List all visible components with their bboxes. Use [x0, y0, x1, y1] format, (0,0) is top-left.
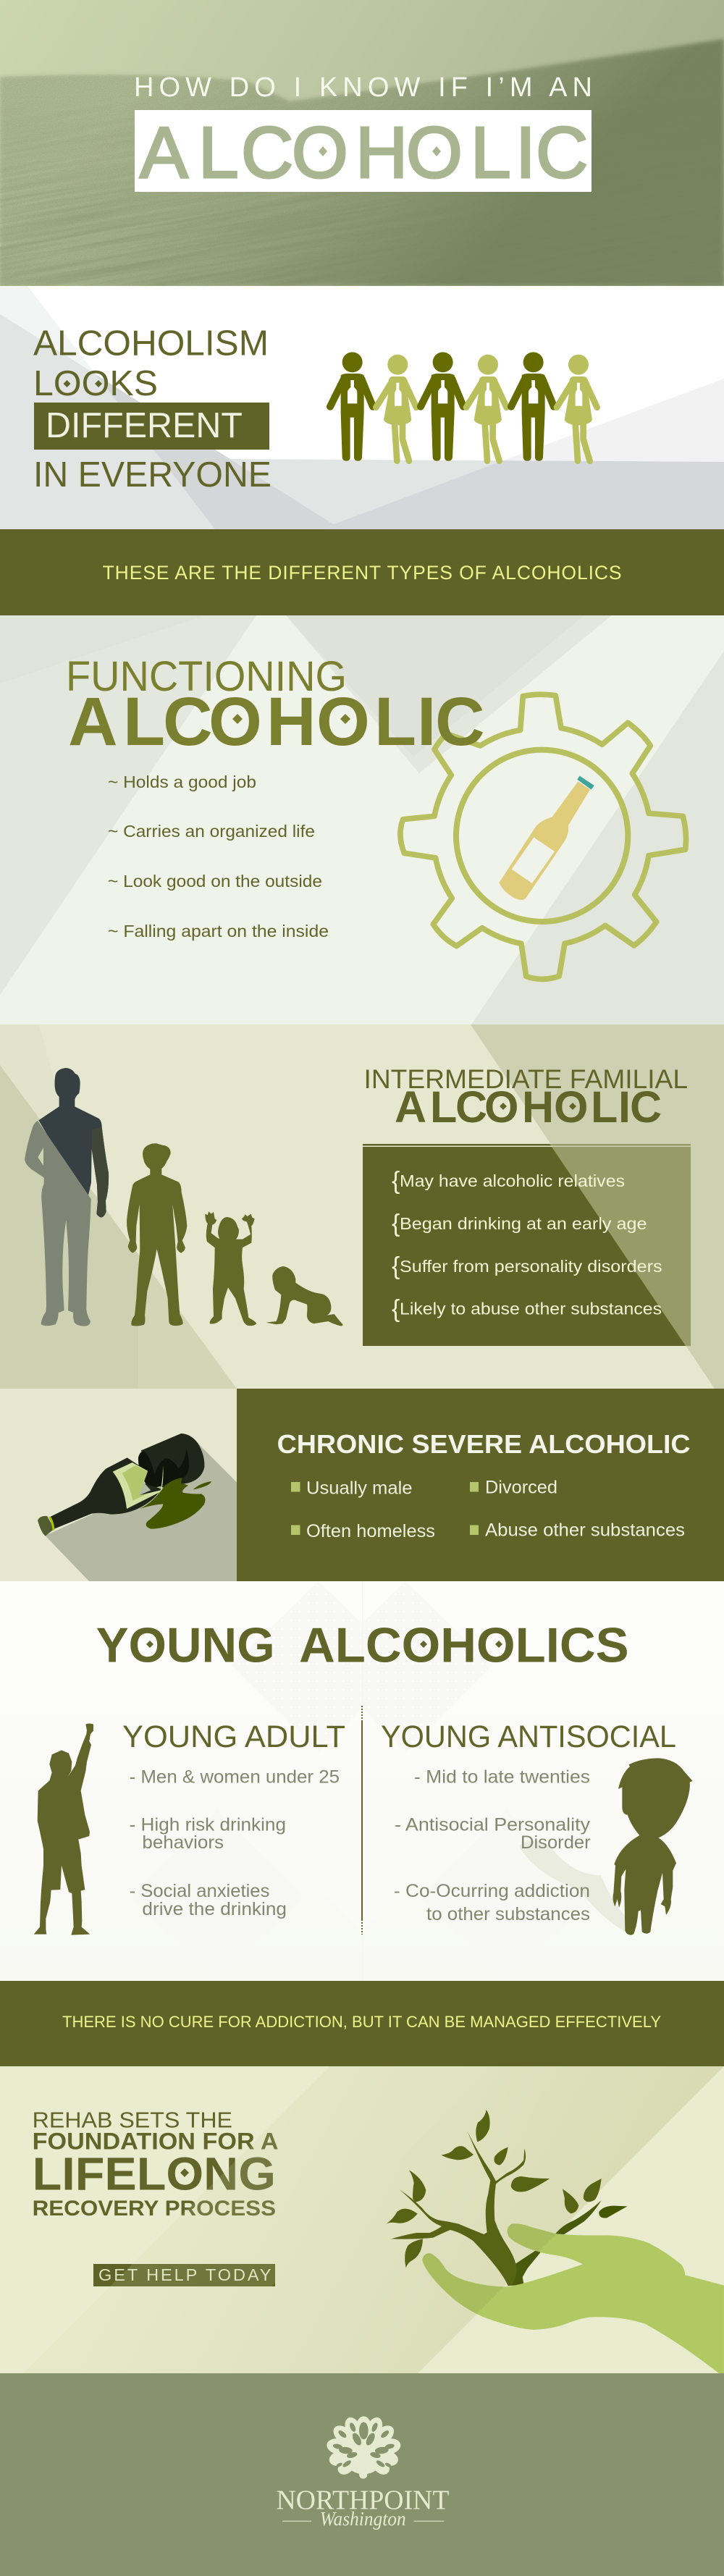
list: functioning traits: ~ Falling apart on the inside — [108, 922, 329, 940]
geometric background — [0, 615, 724, 1024]
box: intermediate traits: { — [392, 1210, 400, 1237]
box: intermediate traits: { — [392, 1295, 400, 1323]
silhouette: crawling baby — [266, 1266, 343, 1326]
heading: alcoholism looks different in everyone — [33, 324, 272, 494]
list: chronic traits: Usually male — [306, 1478, 413, 1499]
slanted background — [0, 2066, 724, 2373]
heading: rehab sets the foundation — [33, 2108, 279, 2221]
box: intermediate traits: { — [392, 1253, 400, 1280]
column: young antisocial: - Antisocial Personality — [395, 1815, 591, 1835]
silhouette: child — [127, 1143, 187, 1326]
column: young antisocial: - Co-Ocurring addiction — [394, 1881, 590, 1901]
heading: intermediate familial alcoholic: ALCOHOLIC — [395, 1082, 662, 1132]
box: intermediate traits — [363, 1144, 691, 1346]
icon: gear with bottle — [400, 694, 686, 979]
illustration: family silhouettes — [25, 1068, 343, 1326]
heading: alcoholism looks different in everyone: DIFFERENT — [46, 406, 243, 445]
center divider — [361, 1706, 363, 1935]
logo wordmark: washington: Washington — [320, 2508, 406, 2530]
box: chronic traits — [237, 1389, 724, 1581]
column: young antisocial — [381, 1720, 676, 1935]
heading: rehab sets the foundation: FOUNDATION FOR A — [33, 2129, 279, 2155]
heading: young alcoholics: YOUNG — [96, 1618, 275, 1673]
column: young adult: YOUNG ADULT — [122, 1720, 345, 1754]
footer panel — [0, 2373, 724, 2576]
column: young adult: - Social anxieties — [130, 1881, 269, 1901]
box: intermediate traits: { — [392, 1167, 400, 1195]
column: young antisocial: Disorder — [521, 1832, 591, 1853]
icon: hand holding sapling — [385, 2110, 724, 2373]
list: functioning traits — [108, 773, 329, 940]
translucent band over text — [23, 2066, 492, 2373]
column: young antisocial: - Mid to late twenties — [414, 1767, 590, 1788]
column: young adult — [122, 1720, 345, 1919]
hero panel — [0, 0, 724, 286]
list: chronic traits — [291, 1478, 685, 1541]
silhouette: man, hand and forearm over panel — [92, 1127, 109, 1218]
sapling — [385, 2110, 628, 2286]
sky and dune background — [0, 0, 724, 286]
column: young antisocial: to other substances — [426, 1904, 590, 1924]
banner: types of alcoholics — [0, 529, 724, 615]
column: young antisocial: YOUNG ANTISOCIAL — [381, 1720, 676, 1754]
column: young adult: - High risk drinking — [130, 1815, 286, 1835]
column: young adult: drive the drinking — [142, 1899, 287, 1919]
panel: chronic severe alcoholic — [0, 1389, 724, 1581]
logo: northpoint peacock mark — [325, 2415, 402, 2479]
heading: intermediate familial alcoholic: INTERMEDIATE FAMILIAL — [363, 1064, 688, 1094]
logo wordmark: northpoint: NORTHPOINT — [277, 2485, 449, 2516]
list: functioning traits: ~ Holds a good job — [108, 773, 256, 791]
panel: functioning alcoholic — [0, 615, 724, 1024]
column: young adult: behaviors — [142, 1832, 224, 1853]
geometric background — [0, 286, 724, 529]
hand — [422, 2223, 724, 2373]
heading: intermediate familial alcoholic — [363, 1064, 688, 1132]
panel: alcoholism looks different — [0, 286, 724, 529]
silhouette: man, dark upper part — [38, 1068, 109, 1218]
box: intermediate traits: Suffer from personality disorders — [400, 1257, 662, 1276]
heading: functioning alcoholic: ALCOHOLIC — [68, 683, 485, 760]
button: get help today: GET HELP TODAY — [98, 2265, 272, 2284]
icon: row of people holding hands — [330, 352, 597, 461]
box: intermediate traits: Began drinking at an early age — [400, 1214, 647, 1233]
heading: rehab sets the foundation: RECOVERY PROCESS — [33, 2197, 276, 2221]
icon: broken bottle with spill — [38, 1434, 237, 1581]
silhouette: toddler — [205, 1211, 256, 1326]
list: chronic traits: Divorced — [485, 1478, 557, 1498]
heading: rehab sets the foundation: REHAB SETS THE — [33, 2108, 232, 2133]
box: intermediate traits: Likely to abuse other substances — [400, 1300, 662, 1318]
geometric background — [0, 1024, 724, 1389]
box: intermediate traits: May have alcoholic relatives — [400, 1171, 625, 1190]
heading: young alcoholics: ALCOHOLICS — [299, 1618, 629, 1673]
banner: types of alcoholics: THESE ARE THE DIFFERENT TYPES OF ALCOHOLICS — [103, 562, 622, 584]
heading: chronic severe alcoholic: CHRONIC SEVERE ALCOHOLIC — [277, 1429, 691, 1459]
silhouette: young adult raising fist — [34, 1723, 93, 1935]
column: young adult: - Men & women under 25 — [130, 1767, 340, 1788]
heading: alcoholism looks different in everyone: LOOKS — [33, 364, 158, 403]
heading: alcoholism looks different in everyone: ALCOHOLISM — [33, 324, 269, 363]
heading: rehab sets the foundation: LIFELONG — [33, 2148, 276, 2200]
list: chronic traits: Often homeless — [306, 1521, 435, 1541]
silhouette: man, gray lower part — [25, 1121, 104, 1326]
diamond pattern background — [0, 1581, 724, 1981]
heading: young alcoholics — [96, 1618, 629, 1673]
list: functioning traits: ~ Carries an organized life — [108, 822, 315, 841]
list: functioning traits: ~ Look good on the outside — [108, 872, 322, 891]
silhouette: big-headed boy — [613, 1758, 693, 1935]
heading: functioning alcoholic: FUNCTIONING — [66, 653, 347, 700]
soft shadow behind boy — [519, 1840, 637, 1935]
left background — [0, 1389, 237, 1581]
hero title box: ALCOHOLIC — [140, 112, 588, 193]
heading: alcoholism looks different in everyone: IN EVERYONE — [33, 455, 272, 494]
list: chronic traits: Abuse other substances — [485, 1520, 685, 1541]
banner: no cure for addiction: THERE IS NO CURE FOR ADDICTION, BUT IT CAN BE MANAGED EFFECTIVELY — [62, 2013, 661, 2031]
panel: intermediate familial alcoholic — [0, 1024, 724, 1389]
banner: no cure for addiction — [0, 1981, 724, 2066]
panel: young alcoholics — [0, 1581, 724, 1981]
hero kicker: HOW DO I KNOW IF I’M AN — [134, 72, 592, 103]
panel: rehab call to action — [0, 2066, 724, 2373]
